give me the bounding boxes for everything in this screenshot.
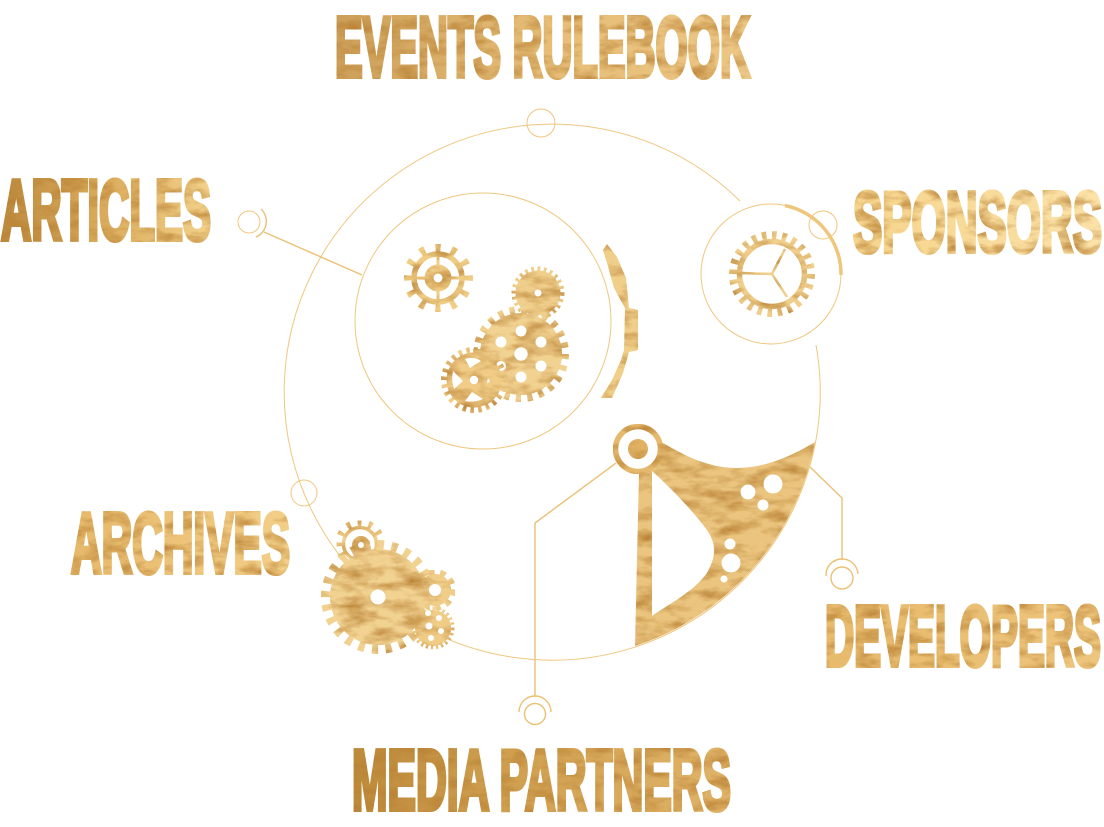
sponsors ring <box>701 204 841 344</box>
top node circle <box>527 109 555 137</box>
panel: sponsors gear <box>701 204 841 344</box>
inner circle around central gears <box>355 193 611 449</box>
icon: lower left gear <box>444 350 504 410</box>
icon: large perforated gear <box>477 310 565 398</box>
ring knockout <box>616 427 660 471</box>
icon: big gear <box>326 544 430 650</box>
text: ARTICLES <box>1 164 211 258</box>
connector: articles <box>238 209 362 275</box>
icon: spoked gear <box>733 235 811 313</box>
text: ARCHIVES <box>71 496 290 592</box>
connector: developers <box>810 467 858 589</box>
lower gear cutouts <box>452 358 490 402</box>
pendulum body <box>635 442 815 646</box>
icon: pendulum sector with ring <box>616 426 815 646</box>
holes in gears <box>496 290 546 382</box>
icon: archives gear cluster <box>326 523 453 650</box>
pendulum ring <box>616 426 660 472</box>
icon: curved bracket <box>601 244 638 398</box>
pendulum core <box>628 439 648 459</box>
connector: media partners <box>519 463 616 724</box>
icon: crosshair gear <box>408 248 472 308</box>
icon: central gear cluster <box>408 248 565 410</box>
icon: right gear <box>417 572 453 608</box>
icon: small perforated gear <box>414 608 452 648</box>
archives gear holes <box>370 584 444 641</box>
label: media partners: MEDIA PARTNERS <box>352 734 731 827</box>
sponsors thick arc <box>785 206 841 275</box>
large outer orbit ring <box>284 124 820 660</box>
icon: small toothed gear <box>514 269 562 317</box>
sponsors small node <box>809 211 837 239</box>
icon: top ring gear <box>339 523 381 565</box>
archives node circle <box>291 480 317 506</box>
